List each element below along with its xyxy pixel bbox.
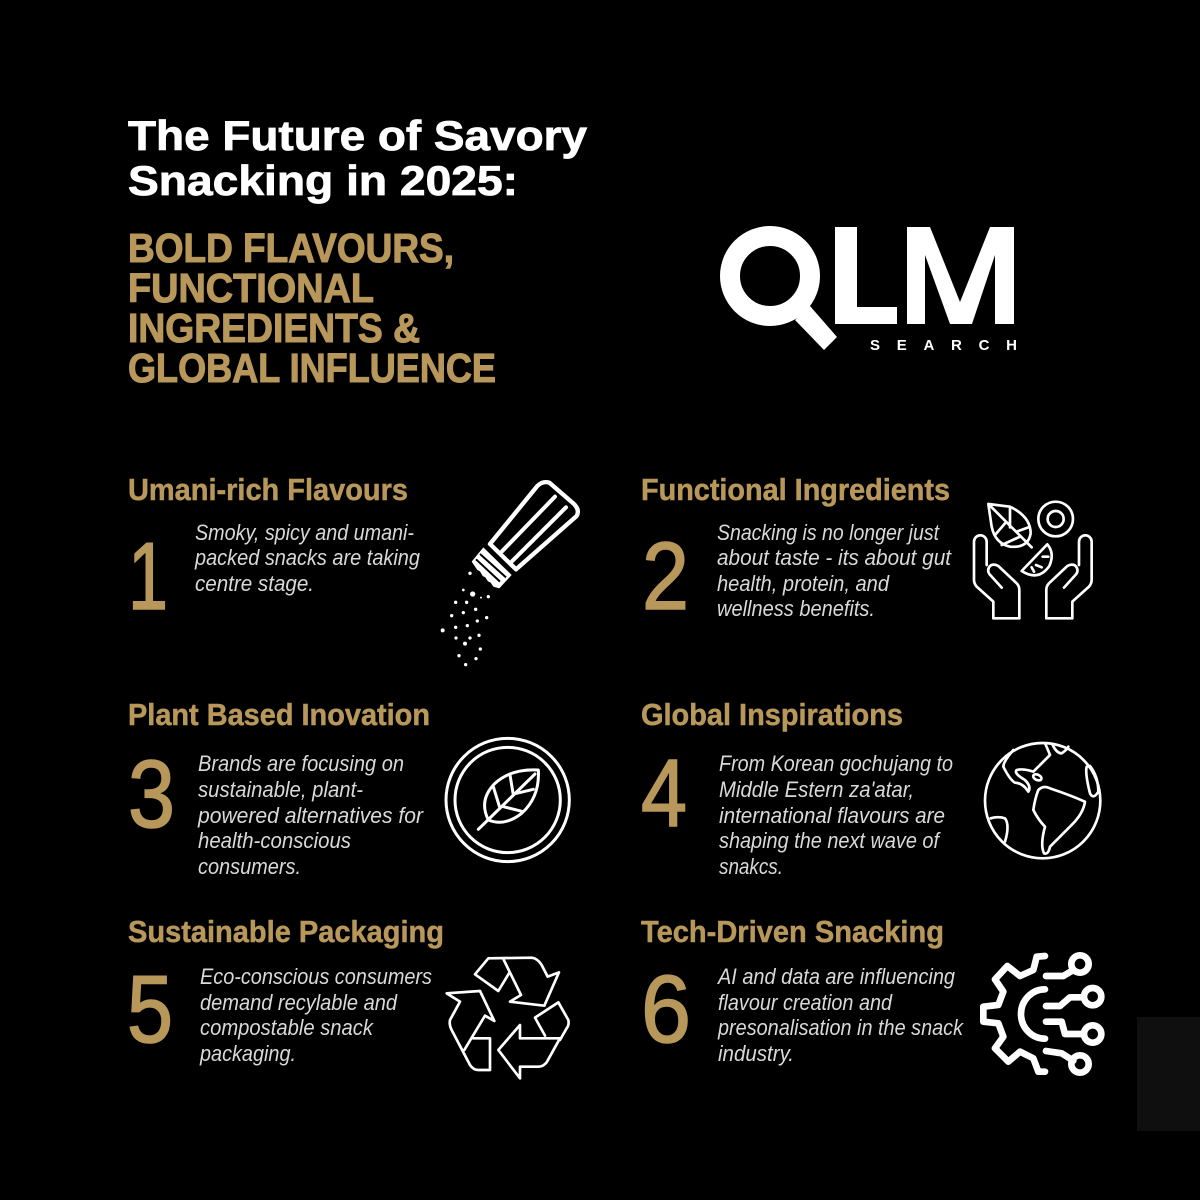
- text block: item 1: packed snacks are taking: [194, 545, 421, 570]
- text block: item 2: [717, 520, 952, 621]
- heading: tech-driven snacking: Tech-Driven Snacking: [641, 914, 944, 949]
- text block: item 6: industry.: [718, 1041, 794, 1066]
- subtitle: INGREDIENTS &: [128, 305, 420, 351]
- text block: item 6: presonalisation in the snack: [717, 1015, 964, 1040]
- heading: functional ingredients: Functional Ingredients: [641, 472, 950, 507]
- text block: item 4: Middle Estern za'atar,: [719, 777, 914, 802]
- text block: item 2: Snacking is no longer just: [717, 520, 940, 545]
- number 2: 2: [642, 523, 689, 630]
- heading: plant based inovation: Plant Based Inovation: [128, 697, 430, 732]
- text block: item 4: shaping the next wave of: [719, 828, 942, 853]
- text block: item 2: about taste - its about gut: [717, 545, 952, 570]
- text block: item 6: [716, 964, 964, 1066]
- text block: item 4: [719, 751, 953, 879]
- heading: umani-rich flavours: Umani-rich Flavours: [128, 472, 408, 507]
- panel: functional ingredients: [641, 472, 1092, 630]
- subtitle: BOLD FLAVOURS,: [128, 225, 454, 271]
- text block: item 5: [199, 964, 432, 1066]
- text block: item 5: demand recylable and: [200, 990, 398, 1015]
- panel: tech-driven snacking: [641, 914, 1101, 1073]
- icon: globe: [985, 743, 1100, 858]
- text block: item 1: Smoky, spicy and umani-: [195, 520, 414, 545]
- text block: item 1: [194, 520, 421, 596]
- panel: umani-rich flavours: [128, 472, 578, 666]
- icon: salt shaker: [441, 482, 578, 666]
- text block: item 3: [197, 751, 425, 879]
- logo: QLM Search: SEARCH: [870, 337, 1017, 354]
- subtitle: GLOBAL INFLUENCE: [128, 345, 496, 391]
- text block: item 5: Eco-conscious consumers: [200, 964, 432, 989]
- text block: item 4: snakcs.: [719, 854, 783, 879]
- title: Snacking in 2025:: [128, 157, 518, 204]
- title: The Future of Savory: [128, 112, 588, 159]
- text block: item 3: health-conscious: [198, 828, 351, 853]
- text block: item 2: health, protein, and: [717, 571, 890, 596]
- icon: hands with leaf and citrus: [974, 502, 1092, 618]
- number 4: 4: [641, 740, 687, 847]
- text block: item 5: packaging.: [199, 1041, 296, 1066]
- icon: leaf in double ring: [446, 738, 569, 862]
- text block: item 3: Brands are focusing on: [198, 751, 404, 776]
- heading: global inspirations: Global Inspirations: [641, 697, 903, 732]
- number 6: 6: [641, 956, 691, 1063]
- heading: sustainable packaging: Sustainable Packaging: [128, 914, 444, 949]
- panel: global inspirations: [641, 697, 1100, 879]
- text block: item 4: From Korean gochujang to: [719, 751, 953, 776]
- panel: plant based innovation: [128, 697, 569, 879]
- number 5: 5: [127, 956, 173, 1063]
- number 3: 3: [128, 741, 175, 848]
- logo: QLM Search: [730, 227, 1017, 354]
- text block: item 1: centre stage.: [195, 571, 314, 596]
- subtitle: [128, 225, 496, 391]
- title: [128, 112, 588, 204]
- text block: item 3: sustainable, plant-: [198, 777, 363, 802]
- number 1: 1: [128, 523, 168, 630]
- panel: sustainable packaging: [127, 914, 569, 1078]
- text block: item 3: consumers.: [198, 854, 301, 879]
- text block: item 2: wellness benefits.: [717, 596, 875, 621]
- icon: recycling arrows: [447, 958, 569, 1078]
- subtitle: FUNCTIONAL: [128, 265, 374, 311]
- text block: item 5: compostable snack: [200, 1015, 374, 1040]
- text block: item 4: international flavours are: [719, 803, 945, 828]
- text block: item 3: powered alternatives for: [197, 803, 425, 828]
- icon: gear with circuit: [983, 955, 1101, 1073]
- text block: item 6: AI and data are influencing: [716, 964, 956, 989]
- text block: item 6: flavour creation and: [718, 990, 893, 1015]
